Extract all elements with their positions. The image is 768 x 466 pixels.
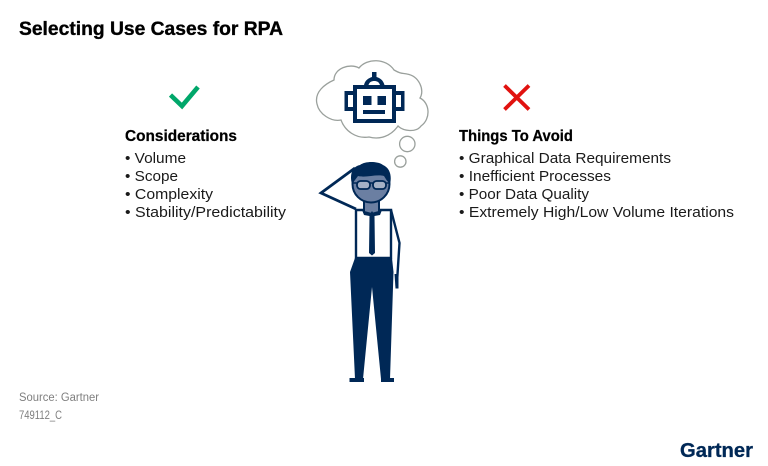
- shoes: [350, 378, 394, 382]
- icon: green check mark: [170, 87, 198, 106]
- icon: red cross: [504, 86, 529, 110]
- raised arm: [321, 168, 356, 209]
- title: Selecting Use Cases for RPA: [19, 19, 283, 40]
- shirt: [356, 210, 391, 258]
- panel: things to avoid: [459, 128, 734, 221]
- list: things to avoid: • Graphical Data Requirements: [459, 150, 671, 167]
- document code: 749112_C: [19, 410, 62, 422]
- hand: [394, 274, 398, 288]
- thought bubble large: [400, 136, 415, 152]
- person scratching head: [321, 162, 400, 382]
- hair: [351, 162, 391, 184]
- panel: considerations: [125, 128, 287, 221]
- cloud outline: [316, 61, 428, 138]
- heading: things to avoid: Things To Avoid: [459, 128, 573, 145]
- list: considerations: • Volume: [125, 150, 186, 167]
- list: things to avoid: • Inefficient Processes: [459, 168, 611, 185]
- glasses: [352, 181, 390, 189]
- thought bubble small: [395, 156, 406, 167]
- neck: [364, 200, 379, 214]
- list: considerations: [125, 150, 287, 221]
- icon: robot: [344, 72, 404, 123]
- right arm: [391, 210, 400, 282]
- collar and tie: [362, 210, 382, 256]
- Gartner logo: Gartner: [680, 440, 753, 462]
- face: [352, 166, 390, 202]
- list: considerations: • Stability/Predictability: [125, 204, 287, 221]
- source note: Source: Gartner: [19, 392, 99, 404]
- list: things to avoid: [459, 150, 734, 221]
- list: considerations: • Scope: [125, 168, 178, 185]
- list: considerations: • Complexity: [125, 186, 214, 203]
- thought cloud with robot: [316, 61, 428, 167]
- heading: considerations: Considerations: [125, 128, 237, 145]
- trousers: [350, 258, 394, 379]
- list: things to avoid: • Poor Data Quality: [459, 186, 590, 203]
- list: things to avoid: • Extremely High/Low Volume Iterations: [459, 204, 734, 221]
